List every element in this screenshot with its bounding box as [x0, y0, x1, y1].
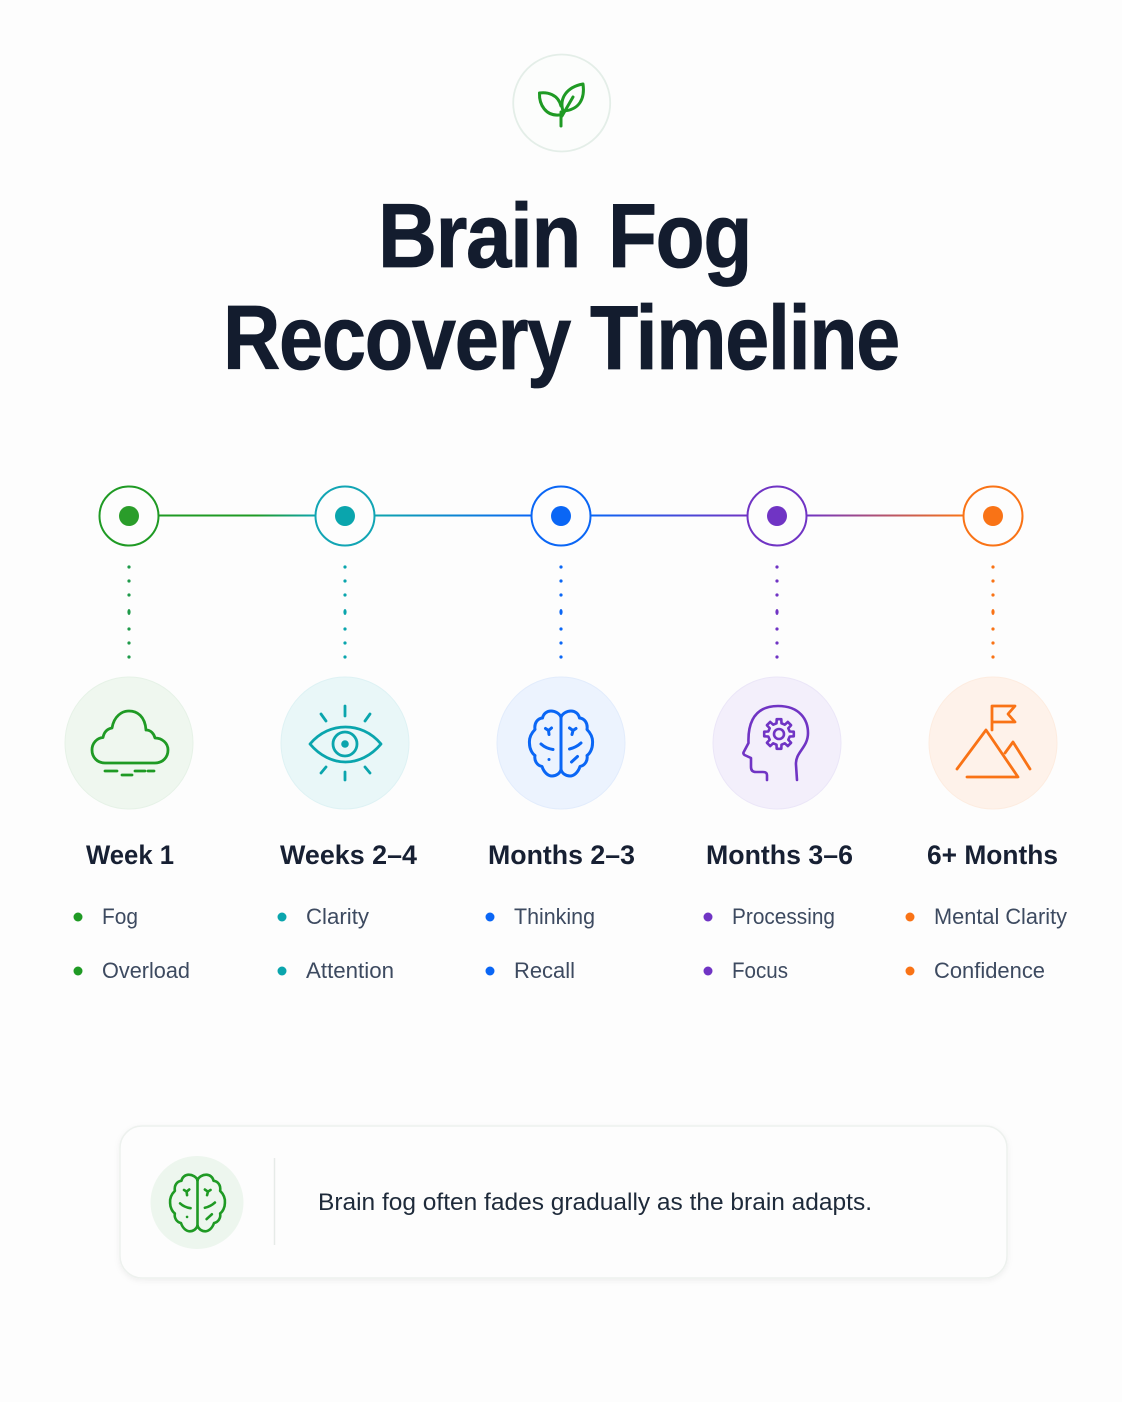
icon: sprout badge — [513, 54, 610, 152]
dotted connector: months 3-6 — [775, 565, 779, 659]
timeline node: weeks 2-4 — [316, 486, 374, 546]
list: week 1: Fog — [102, 904, 138, 929]
dotted connector: weeks 2-4 — [343, 565, 347, 659]
list: week 1 — [74, 904, 190, 983]
heading: months 3-6: Months 3–6 — [706, 840, 853, 870]
list: weeks 2-4: Attention — [306, 958, 394, 983]
timeline node: week 1 — [100, 486, 158, 546]
heading: weeks 2-4: Weeks 2–4 — [280, 840, 417, 870]
timeline node: months 3-6 — [748, 486, 806, 546]
title — [223, 186, 899, 389]
callout card — [120, 1126, 1007, 1278]
callout text: Brain fog often fades gradually as the brain adapts. — [318, 1189, 872, 1216]
list: 6+ months: Mental Clarity — [934, 904, 1067, 929]
heading: months 2-3: Months 2–3 — [488, 840, 635, 870]
list: months 2-3: Thinking — [514, 904, 595, 929]
heading: week 1: Week 1 — [86, 840, 174, 870]
title: Timeline — [590, 288, 899, 389]
list: months 3-6: Focus — [732, 958, 788, 983]
title: Fog — [608, 186, 751, 287]
list: months 2-3: Recall — [514, 958, 575, 983]
list: months 3-6 — [704, 904, 835, 983]
panel: week 1 — [65, 486, 193, 983]
panel: weeks 2-4 — [278, 486, 417, 983]
title: Recovery — [223, 288, 572, 389]
list: months 3-6: Processing — [732, 904, 835, 929]
timeline node: months 2-3 — [532, 486, 590, 546]
list: 6+ months: Confidence — [934, 958, 1045, 983]
title: Brain — [378, 186, 580, 287]
list: weeks 2-4: Clarity — [306, 904, 369, 929]
icon: cloud — [65, 677, 193, 809]
list: weeks 2-4 — [278, 904, 394, 983]
panel: months 2-3 — [486, 486, 635, 983]
dotted connector: months 2-3 — [559, 565, 563, 659]
panel: 6+ months — [906, 486, 1067, 983]
icon: eye — [281, 677, 409, 809]
dotted connector: 6+ months — [991, 565, 995, 659]
icon: green brain — [150, 1156, 244, 1249]
list: 6+ months — [906, 904, 1067, 983]
heading: 6+ months: 6+ Months — [927, 840, 1058, 870]
list: months 2-3 — [486, 904, 595, 983]
icon: brain — [497, 677, 625, 809]
panel: months 3-6 — [704, 486, 853, 983]
icon: mountain with flag — [929, 677, 1057, 809]
timeline node: 6+ months — [964, 486, 1022, 546]
timeline connector line — [159, 514, 963, 516]
list: week 1: Overload — [102, 958, 190, 983]
icon: head with gear — [713, 677, 841, 809]
dotted connector: week 1 — [127, 565, 131, 659]
